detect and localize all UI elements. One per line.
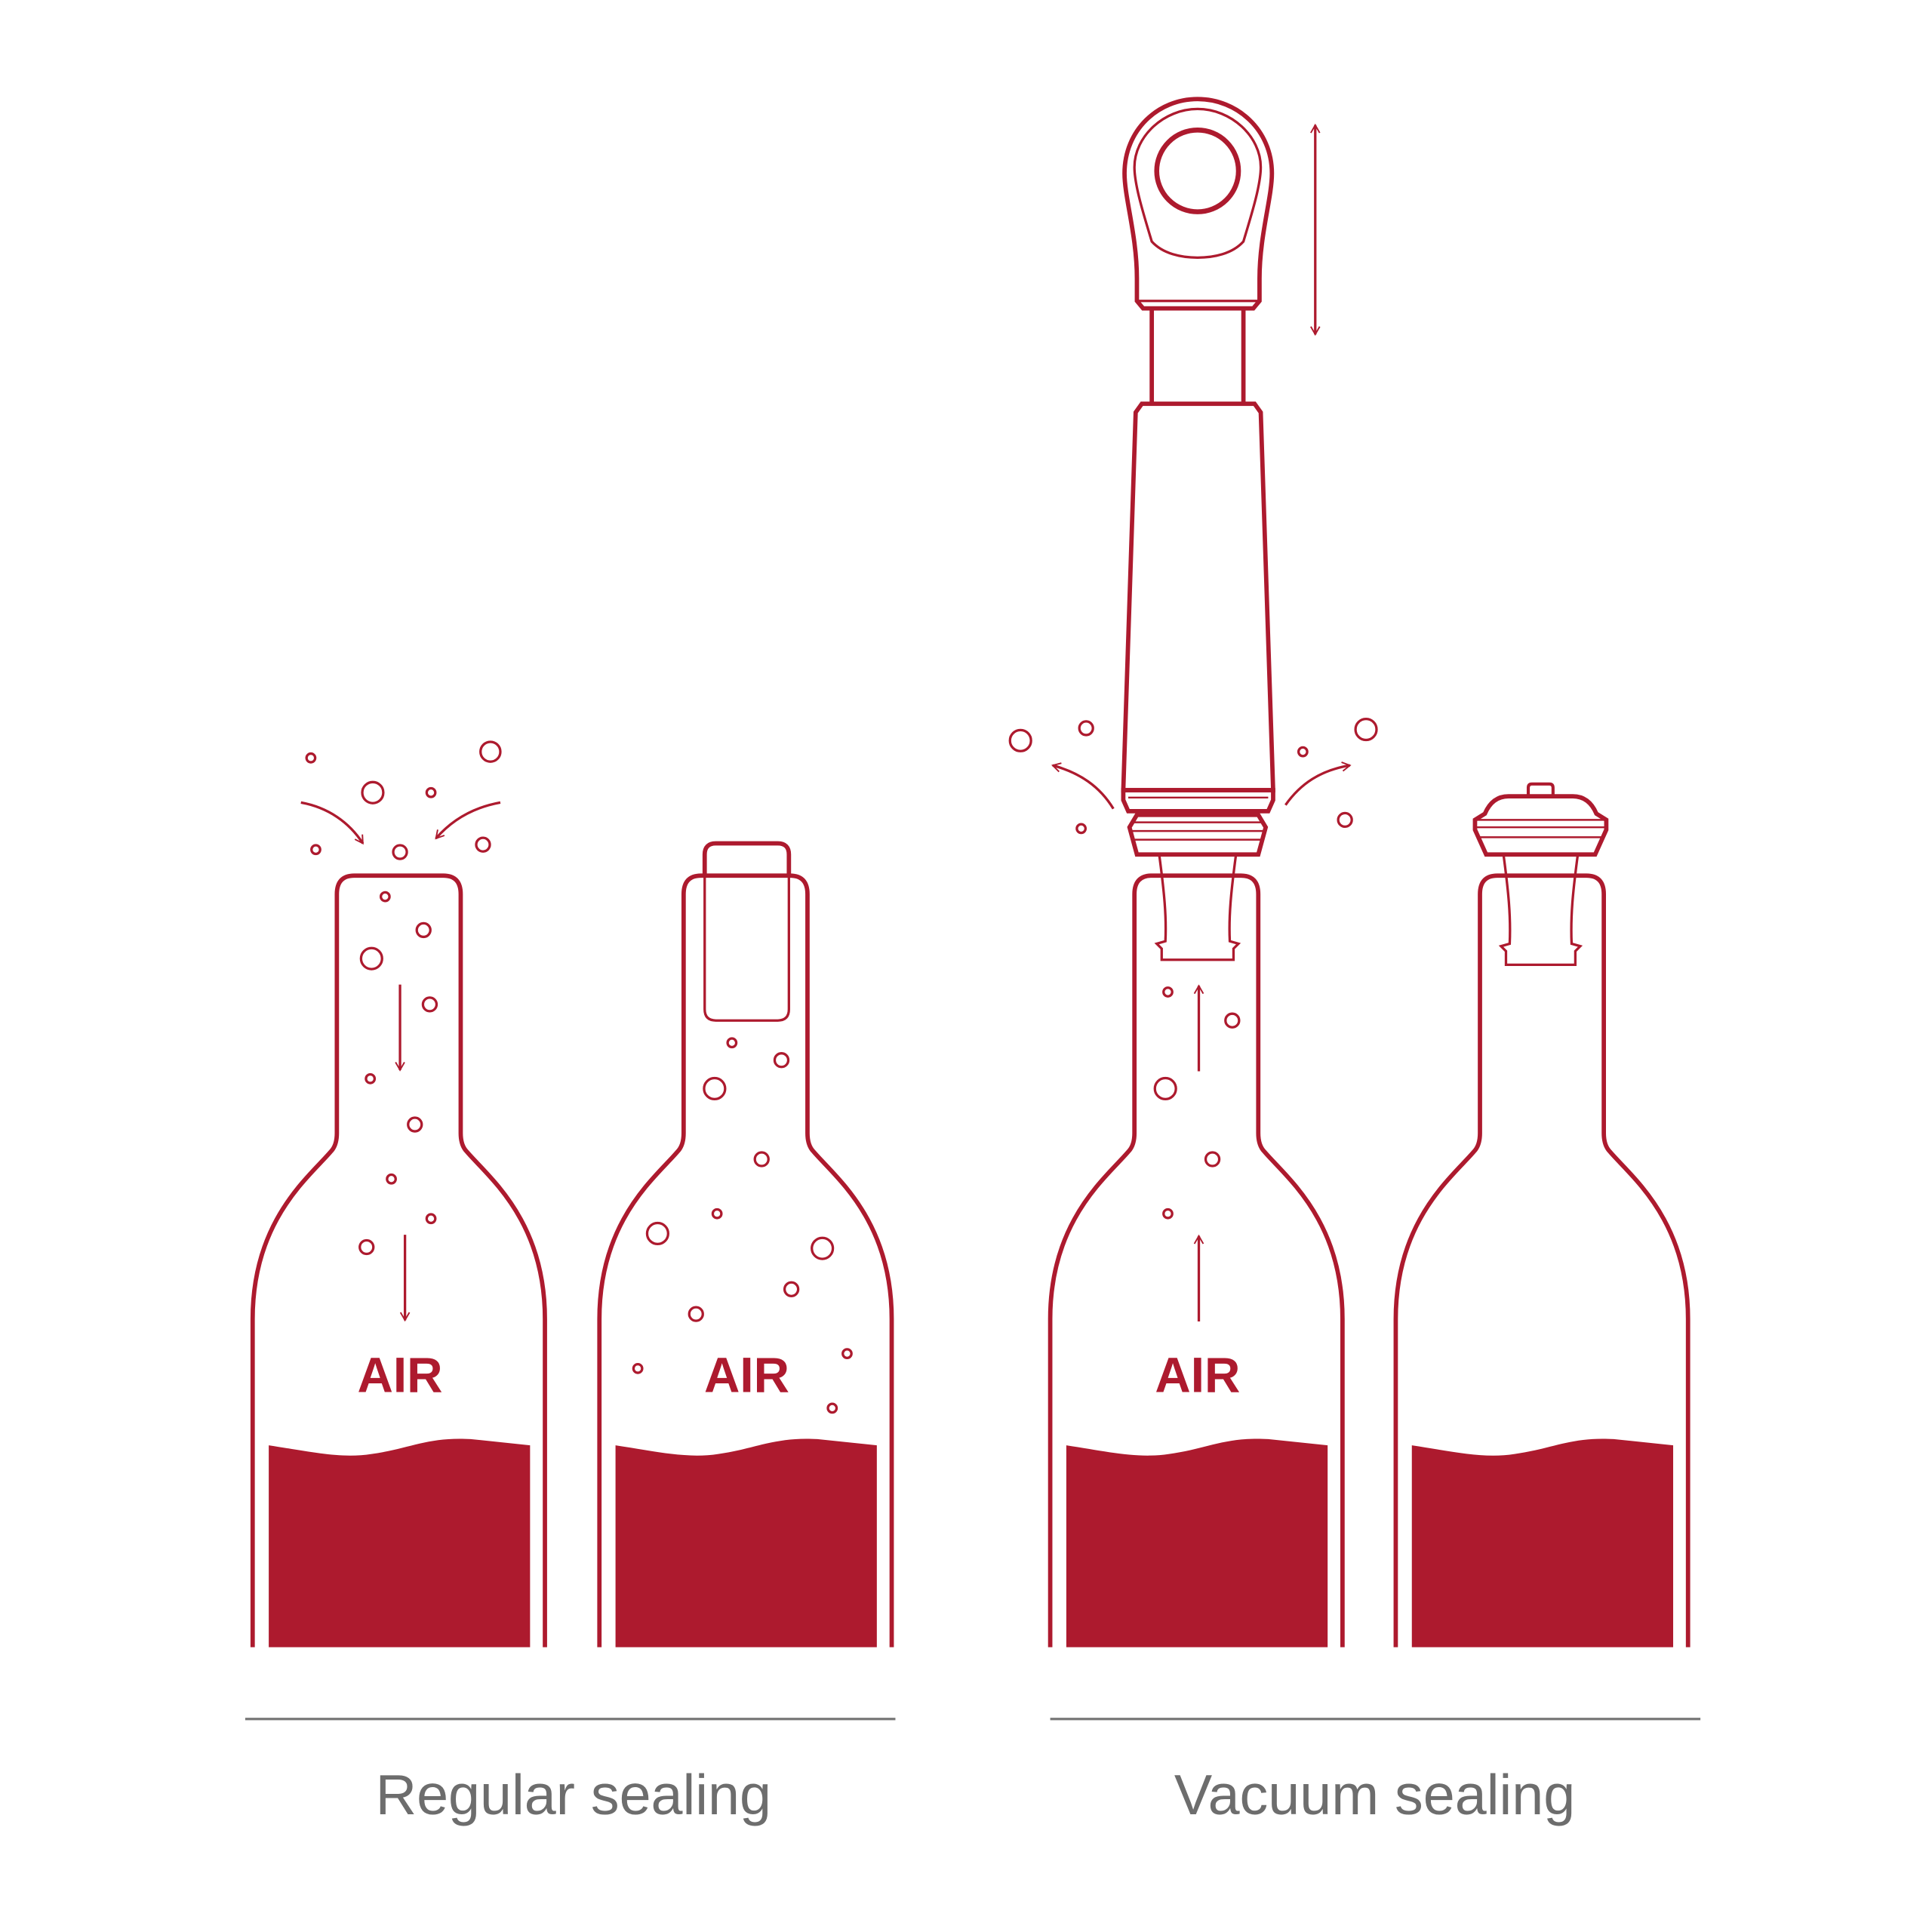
up/down arrow xyxy=(1315,125,1316,334)
stopper xyxy=(1528,784,1553,795)
AIR label 1: AIR xyxy=(358,1348,443,1403)
bottle 4: vacuum stopper xyxy=(1395,784,1688,1647)
cork xyxy=(705,844,789,875)
pump device xyxy=(1123,99,1273,960)
caption regular: Regular sealing xyxy=(376,1763,771,1826)
bottle 2: cork xyxy=(599,844,892,1647)
AIR label 3: AIR xyxy=(1155,1348,1240,1403)
divider line vacuum xyxy=(1051,1718,1700,1720)
bottle 1: regular open xyxy=(253,742,545,1647)
AIR label 2: AIR xyxy=(704,1348,789,1403)
wine 1 xyxy=(269,1438,530,1647)
caption vacuum: Vacuum sealing xyxy=(1174,1763,1575,1826)
divider line regular xyxy=(245,1718,895,1720)
bubbles and arrows 1 xyxy=(301,742,500,1320)
bottle 3: vacuum pump xyxy=(1010,99,1377,1647)
